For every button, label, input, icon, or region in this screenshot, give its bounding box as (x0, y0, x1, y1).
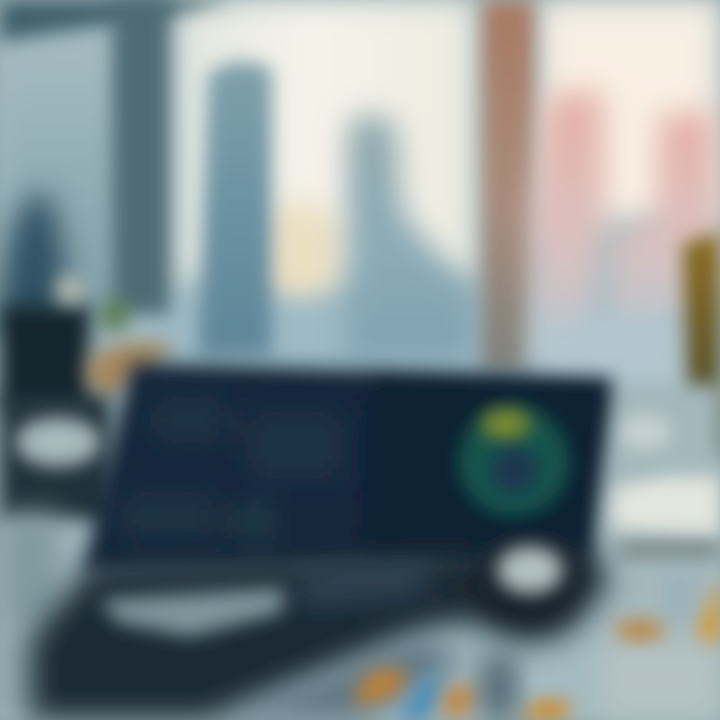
upper deck tone (300, 565, 430, 605)
olive plant on right (682, 235, 720, 455)
top-left window frame (0, 0, 235, 42)
right distant haze (540, 320, 690, 390)
skyline tower two (345, 115, 475, 360)
dark window pillar (112, 0, 170, 315)
pink skyline tower (530, 90, 606, 370)
keyboard base (30, 545, 610, 720)
screen right dark panel (365, 378, 606, 556)
laptop (82, 362, 612, 572)
bottom orange and blue objects (352, 655, 570, 720)
skyline tower one (198, 61, 272, 355)
hand near laptop (88, 342, 175, 395)
copper column (482, 0, 534, 370)
laptop screen (82, 362, 612, 572)
table surface on right (600, 385, 720, 720)
pink distant tower (610, 110, 720, 350)
screen content tones (120, 395, 345, 545)
dark object with white blob (468, 538, 592, 642)
keyboard highlight (100, 588, 285, 636)
left foreground plant (0, 190, 129, 410)
left desk tones (0, 395, 110, 720)
green donut chart (459, 407, 569, 517)
lower wedge (220, 640, 470, 720)
orange objects lower right (616, 585, 720, 645)
